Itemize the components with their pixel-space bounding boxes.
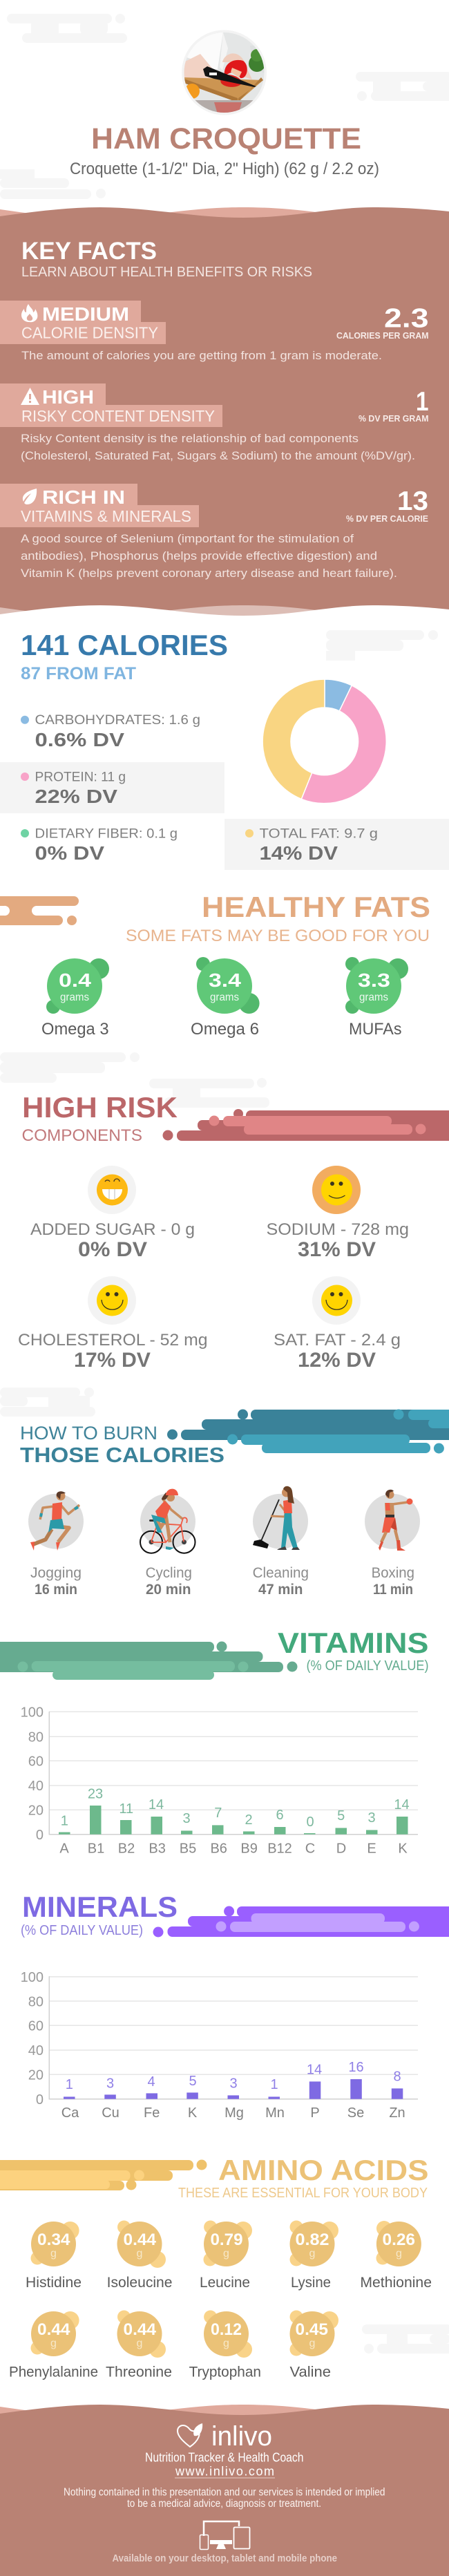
activity: cleaning: 47 min <box>258 1582 303 1598</box>
bar chart: minerals: P <box>310 2105 320 2121</box>
panel: high risk <box>18 1091 449 1372</box>
bar chart: vitamins: 1 <box>61 1814 68 1829</box>
bar chart: minerals: 14 <box>307 2063 322 2078</box>
bar chart: vitamins: 20 <box>28 1803 44 1819</box>
legend: protein: PROTEIN: 11 g <box>35 770 126 785</box>
bar chart: vitamins: 14 <box>149 1797 164 1812</box>
amino: histidine <box>26 2222 82 2291</box>
bar chart: vitamins: 60 <box>28 1754 44 1769</box>
heading: amino acids: AMINO ACIDS <box>218 2154 428 2186</box>
badge: omega 6: 3.4 <box>209 969 241 991</box>
legend: total fat: 14% DV <box>260 842 338 864</box>
amino: methionine: Methionine <box>360 2275 432 2291</box>
risky content density block: Risky Content density is the relationship of bad components <box>21 432 359 445</box>
bar chart: vitamins: D <box>336 1841 346 1857</box>
rich in block: RICH IN <box>42 486 125 508</box>
heading: healthy fats: HEALTHY FATS <box>202 891 430 923</box>
bar chart: vitamins: B1 <box>88 1841 104 1857</box>
bar chart: vitamins: 7 <box>214 1806 222 1821</box>
bar chart: minerals: 4 <box>147 2074 155 2090</box>
decorative bars: yellow <box>0 2160 207 2190</box>
activity: boxing: 11 min <box>373 1582 413 1598</box>
bar chart: vitamins: 80 <box>28 1730 44 1745</box>
legend: total fat <box>224 819 449 870</box>
item: saturated fat: 12% DV <box>298 1349 376 1372</box>
activity: boxing <box>365 1490 420 1598</box>
legend: carbohydrates <box>21 713 200 750</box>
amino: lysine: Lysine <box>291 2275 331 2291</box>
item: added sugar: ADDED SUGAR - 0 g <box>30 1220 195 1239</box>
amino: leucine: Leucine <box>200 2275 250 2291</box>
amino: valine: g <box>309 2338 315 2349</box>
amino: isoleucine: 0.44 <box>123 2231 157 2249</box>
icon: devices <box>200 2521 250 2550</box>
disclaimer <box>64 2487 385 2510</box>
panel: calories <box>0 629 449 870</box>
donut chart <box>262 679 386 804</box>
amino: isoleucine: Isoleucine <box>107 2275 173 2291</box>
badge: omega 3: 0.4 <box>59 969 91 991</box>
rich in block: % DV PER CALORIE <box>346 513 428 524</box>
website link: www.inlivo.com <box>175 2465 274 2479</box>
decorative bars: orange <box>0 896 79 925</box>
amino: histidine: Histidine <box>26 2275 82 2291</box>
amino: tryptophan: Tryptophan <box>189 2364 261 2380</box>
activity: cycling: 20 min <box>146 1582 191 1598</box>
badge: omega 6: Omega 6 <box>191 1020 259 1039</box>
bar chart: vitamins: 2 <box>245 1812 253 1828</box>
subheading: LEARN ABOUT HEALTH BENEFITS OR RISKS <box>21 264 312 280</box>
panel: vitamins <box>0 1627 428 1857</box>
bar chart: minerals: 1 <box>66 2077 73 2092</box>
activity: jogging <box>28 1491 84 1598</box>
header <box>70 28 379 178</box>
amino: isoleucine: g <box>137 2248 142 2260</box>
badge: MUFAs: MUFAs <box>349 1020 402 1039</box>
legend: total fat: TOTAL FAT: 9.7 g <box>260 827 378 842</box>
decorative bars: teal <box>167 1410 449 1454</box>
item: sodium <box>267 1166 409 1261</box>
stat: calories per gram: 2.3 <box>384 304 428 333</box>
amino: tryptophan: 0.12 <box>211 2320 242 2339</box>
amino: methionine: 0.26 <box>383 2231 415 2249</box>
item: saturated fat: SAT. FAT - 2.4 g <box>274 1331 401 1349</box>
amino: lysine: g <box>309 2248 315 2260</box>
badge: omega 3: grams <box>60 992 89 1003</box>
serving size: Croquette (1-1/2" Dia, 2" High) (62 g / 2.2 oz) <box>70 160 379 178</box>
subheading: components: COMPONENTS <box>22 1126 142 1145</box>
bar chart: minerals: Cu <box>102 2105 120 2121</box>
item: sodium: SODIUM - 728 mg <box>267 1220 409 1239</box>
bar chart: vitamins: K <box>398 1841 408 1857</box>
subheading: from fat: 87 FROM FAT <box>21 664 136 683</box>
legend: protein <box>0 762 224 813</box>
panel: amino acids <box>0 2154 432 2380</box>
badge: omega 3: Omega 3 <box>41 1020 109 1039</box>
item: cholesterol: CHOLESTEROL - 52 mg <box>18 1331 207 1349</box>
icon: leaf <box>23 489 37 504</box>
icon: flame <box>21 304 37 322</box>
legend: protein: 22% DV <box>35 786 117 807</box>
decorative bars: red <box>163 1109 449 1141</box>
risky content density block: HIGH <box>42 386 94 408</box>
amino: valine: Valine <box>290 2364 331 2380</box>
item: sodium: 31% DV <box>298 1238 376 1261</box>
bar chart: minerals: 40 <box>28 2043 44 2058</box>
amino: methionine <box>360 2221 432 2291</box>
bar chart: vitamins: 6 <box>276 1808 284 1823</box>
amino: isoleucine <box>107 2221 173 2291</box>
heading: those calories: THOSE CALORIES <box>20 1443 224 1467</box>
bar chart: vitamins: B6 <box>210 1841 227 1857</box>
bar chart: minerals: Zn <box>389 2105 405 2121</box>
bar chart: vitamins: 14 <box>394 1797 410 1812</box>
legend: dietary fiber: DIETARY FIBER: 0.1 g <box>35 827 178 842</box>
logo: heart and leaf <box>178 2423 202 2447</box>
decorative bars: purple <box>153 1906 449 1938</box>
calorie density block: CALORIE DENSITY <box>21 323 158 341</box>
bar chart: minerals: Ca <box>61 2105 79 2121</box>
bar chart: minerals: 8 <box>393 2070 401 2085</box>
amino: phenylalanine: 0.44 <box>37 2320 70 2339</box>
amino: threonine: Threonine <box>106 2364 172 2380</box>
disclaimer: to be a medical advice, diagnosis or treatment. <box>127 2498 321 2510</box>
rich in block: A good source of Selenium (important for the stimulation of <box>21 532 354 545</box>
calorie density block: MEDIUM <box>42 303 129 325</box>
amino: lysine: 0.82 <box>296 2231 329 2249</box>
bar chart: minerals: 3 <box>229 2076 238 2092</box>
calorie density block <box>0 301 428 362</box>
badge: MUFAs: 3.3 <box>358 969 390 991</box>
amino: leucine <box>200 2221 252 2291</box>
bar chart: minerals: 1 <box>270 2077 278 2092</box>
amino: phenylalanine <box>9 2311 98 2380</box>
legend: carbohydrates: 0.6% DV <box>35 729 124 750</box>
bar chart: vitamins: A <box>59 1841 69 1857</box>
legend: carbohydrates: CARBOHYDRATES: 1.6 g <box>35 713 200 728</box>
amino: methionine: g <box>396 2248 402 2260</box>
bar chart: minerals: K <box>188 2105 198 2121</box>
availability note: Available on your desktop, tablet and mobile phone <box>112 2553 337 2564</box>
amino: lysine <box>290 2221 338 2291</box>
bar chart: minerals: 0 <box>36 2092 44 2108</box>
bar chart: vitamins: 5 <box>337 1808 345 1824</box>
badge: MUFAs: grams <box>359 992 388 1003</box>
legend: dietary fiber: 0% DV <box>35 842 104 864</box>
bar chart: vitamins: B5 <box>180 1841 196 1857</box>
bar chart: minerals: Se <box>347 2105 364 2121</box>
bar chart: vitamins: 0 <box>36 1828 44 1843</box>
decorative bars: green <box>0 1642 297 1680</box>
panel: healthy fats <box>0 891 430 1039</box>
rich in block: antibodies), Phosphorus (helps provide effective digestion) and <box>21 549 377 562</box>
heading: calories: 141 CALORIES <box>21 629 228 661</box>
bar chart: minerals: 80 <box>28 1994 44 2009</box>
amino: valine <box>290 2311 338 2380</box>
risky content density block: (Cholesterol, Saturated Fat, Sugars & Sodium) to the amount (%DV/gr). <box>21 449 415 462</box>
amino: histidine: g <box>50 2248 57 2260</box>
bar chart: vitamins: B12 <box>267 1841 292 1857</box>
activity: cycling: Cycling <box>146 1565 192 1581</box>
amino: histidine: 0.34 <box>37 2231 70 2249</box>
subheading: (% OF DAILY VALUE) <box>21 1923 143 1938</box>
bar chart: minerals: Fe <box>144 2105 160 2121</box>
bar chart: vitamins: C <box>305 1841 315 1857</box>
bar chart: minerals: 5 <box>189 2074 197 2089</box>
amino: threonine: g <box>137 2338 142 2349</box>
bar chart: vitamins: B2 <box>118 1841 135 1857</box>
tagline: Nutrition Tracker & Health Coach <box>145 2451 304 2465</box>
rich in block: Vitamin K (helps prevent coronary artery disease and heart failure). <box>21 567 397 580</box>
rich in block: VITAMINS & MINERALS <box>21 507 191 525</box>
amino: tryptophan <box>189 2311 261 2380</box>
heading: key facts: KEY FACTS <box>21 238 157 265</box>
bar chart: vitamins <box>21 1705 418 1857</box>
bar chart: minerals <box>21 1970 418 2121</box>
bar chart: vitamins: E <box>367 1841 376 1857</box>
bar chart: minerals: 16 <box>348 2060 364 2075</box>
bar chart: vitamins: 11 <box>119 1801 133 1817</box>
item: added sugar <box>30 1166 195 1261</box>
bar chart: minerals: 60 <box>28 2019 44 2034</box>
bar chart: vitamins: 40 <box>28 1779 44 1794</box>
subheading: THESE ARE ESSENTIAL FOR YOUR BODY <box>178 2186 428 2201</box>
heading: vitamins: VITAMINS <box>278 1627 428 1659</box>
amino: phenylalanine: Phenylalanine <box>9 2364 98 2380</box>
amino: leucine: 0.79 <box>210 2231 243 2249</box>
amino: tryptophan: g <box>223 2338 229 2349</box>
item: saturated fat <box>274 1276 401 1372</box>
calorie density block: The amount of calories you are getting from 1 gram is moderate. <box>21 349 382 362</box>
badge: MUFAs <box>345 957 408 1039</box>
item: cholesterol <box>18 1276 207 1372</box>
legend: dietary fiber <box>21 827 178 864</box>
title: HAM CROQUETTE <box>91 122 361 155</box>
heading: minerals: MINERALS <box>22 1891 178 1923</box>
bar chart: vitamins: B3 <box>149 1841 166 1857</box>
bar chart: minerals: 100 <box>21 1970 44 1985</box>
icon: warning <box>21 388 39 405</box>
badge: omega 6: grams <box>210 992 239 1003</box>
bar chart: vitamins: B9 <box>240 1841 258 1857</box>
food photo <box>182 30 267 115</box>
activity: cycling <box>140 1489 195 1598</box>
heading: high risk: HIGH RISK <box>22 1091 178 1124</box>
bar chart: minerals: 3 <box>106 2076 114 2092</box>
bar chart: vitamins: 3 <box>367 1810 376 1826</box>
bar chart: vitamins: 0 <box>306 1815 314 1830</box>
bar chart: vitamins: 23 <box>88 1787 103 1802</box>
amino: valine: 0.45 <box>296 2320 328 2339</box>
item: added sugar: 0% DV <box>78 1238 147 1261</box>
rich in block <box>0 484 428 580</box>
activity: cleaning <box>253 1486 309 1598</box>
activity: jogging: 16 min <box>35 1582 77 1598</box>
risky content density block: RISKY CONTENT DENSITY <box>21 407 215 425</box>
heading: how to burn: HOW TO BURN <box>20 1423 157 1443</box>
disclaimer: Nothing contained in this presentation and our services is intended or implied <box>64 2487 385 2499</box>
logo: wordmark: inlivo <box>211 2421 272 2452</box>
amino: phenylalanine: g <box>50 2338 57 2349</box>
stat: dv per calorie: 13 <box>397 486 428 516</box>
subheading: SOME FATS MAY BE GOOD FOR YOU <box>126 927 430 945</box>
item: cholesterol: 17% DV <box>74 1349 151 1372</box>
subheading: (% OF DAILY VALUE) <box>307 1658 428 1674</box>
bar chart: minerals: 20 <box>28 2067 44 2083</box>
risky content density block: % DV PER GRAM <box>359 413 428 424</box>
panel: key facts <box>0 207 449 622</box>
panel: minerals <box>21 1891 449 2121</box>
bar chart: minerals: Mg <box>224 2105 244 2121</box>
amino: threonine <box>106 2311 172 2380</box>
bar chart: vitamins: 100 <box>21 1705 44 1721</box>
panel: footer <box>0 2405 449 2576</box>
risky content density block <box>0 383 428 462</box>
panel: burn calories <box>20 1410 449 1598</box>
bar chart: minerals: Mn <box>265 2105 285 2121</box>
activity: cleaning: Cleaning <box>253 1565 309 1581</box>
badge: omega 6 <box>191 957 260 1039</box>
bar chart: vitamins: 3 <box>182 1811 191 1826</box>
stat: dv per gram: 1 <box>416 387 428 417</box>
amino: threonine: 0.44 <box>123 2320 157 2339</box>
badge: omega 3 <box>41 958 109 1039</box>
amino: leucine: g <box>223 2248 229 2260</box>
calorie density block: CALORIES PER GRAM <box>336 330 428 341</box>
activity: jogging: Jogging <box>30 1565 82 1581</box>
activity: boxing: Boxing <box>372 1565 414 1581</box>
